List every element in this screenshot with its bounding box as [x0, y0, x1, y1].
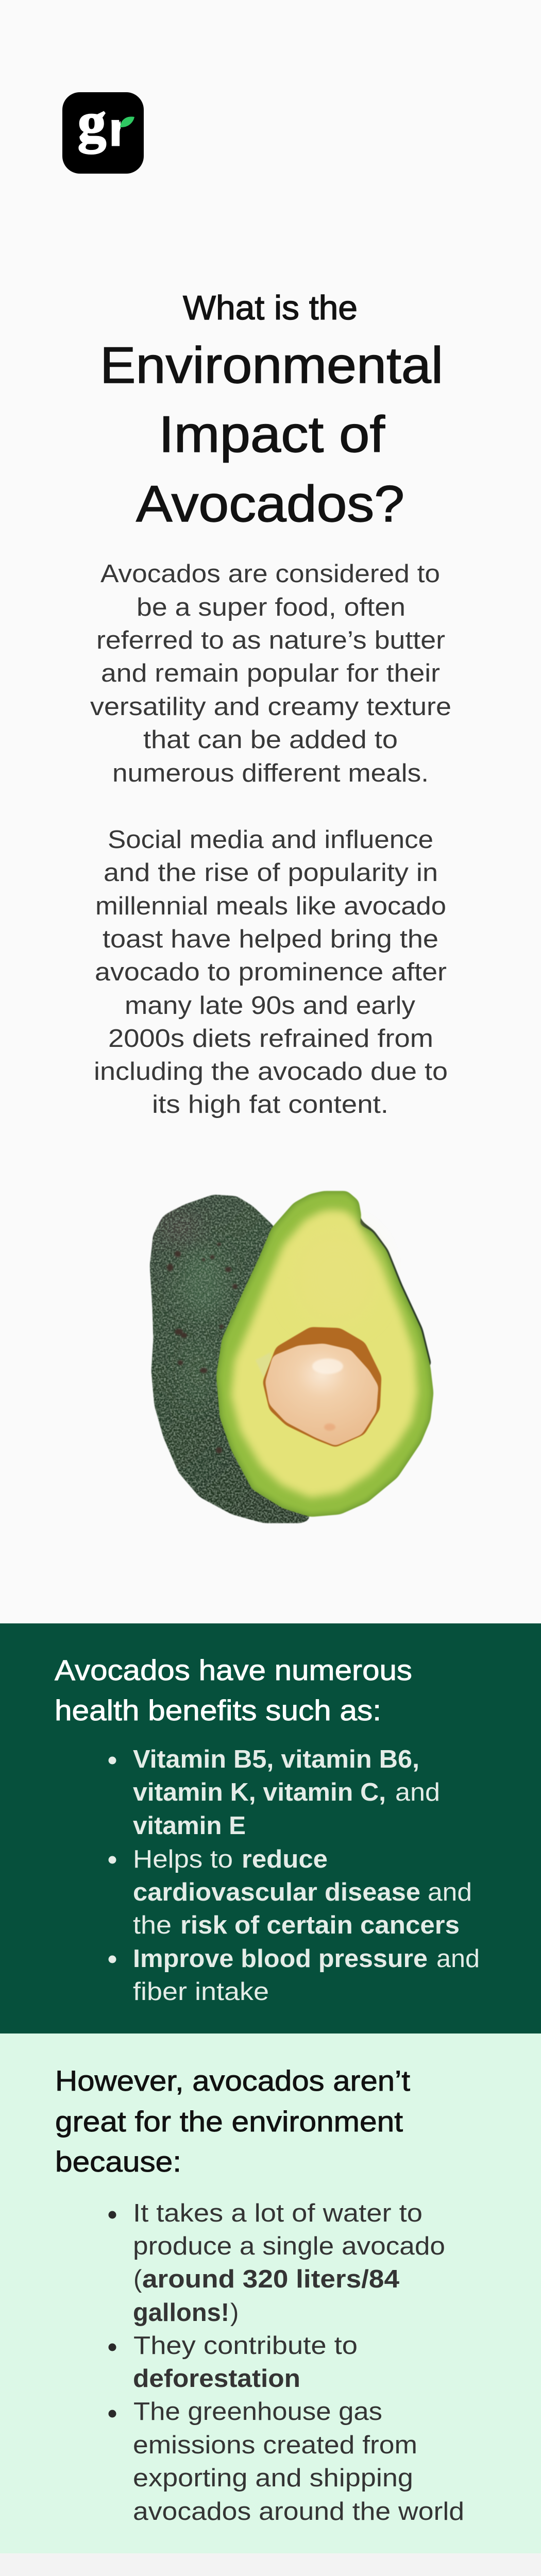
list: health benefits: fiber intake: [133, 1978, 269, 2006]
second paragraph: avocado to prominence after: [95, 958, 447, 986]
title: Environmental: [100, 336, 443, 394]
list: health benefits: the: [133, 1911, 172, 1939]
list: health benefits: cardiovascular disease: [133, 1878, 420, 1906]
list: environmental issues: gallons!: [133, 2299, 229, 2327]
avocado skin: [150, 1195, 309, 1523]
list: health benefits: [108, 1745, 480, 2006]
list: health benefits: vitamin E: [133, 1812, 246, 1840]
list: health benefits: Improve blood pressure: [133, 1945, 428, 1973]
list: environmental issues: deforestation: [133, 2365, 300, 2393]
second paragraph: many late 90s and early: [125, 992, 416, 1020]
list: environmental issues: They contribute to: [133, 2332, 358, 2360]
intro paragraph: numerous different meals.: [112, 759, 429, 787]
list: environmental issues: emissions created from: [133, 2431, 417, 2459]
avocado seed: [256, 1327, 381, 1447]
list: health benefits: reduce: [242, 1845, 328, 1873]
intro paragraph: Avocados are considered to: [100, 560, 440, 588]
intro paragraph: be a super food, often: [137, 594, 405, 621]
panel: environmental issues: [0, 2033, 541, 2553]
second paragraph: millennial meals like avocado: [95, 892, 446, 920]
list: health benefits: Vitamin B5, vitamin B6,: [133, 1745, 419, 1773]
list: health benefits: Helps to: [133, 1845, 233, 1873]
logo icon: gr app badge: r: [109, 104, 127, 156]
list: health benefits: and: [395, 1778, 440, 1806]
intro paragraph: and remain popular for their: [101, 659, 440, 687]
second paragraph: Social media and influence: [108, 826, 433, 854]
illustration: halved avocado: [150, 1192, 432, 1523]
list: health benefits: risk of certain cancers: [180, 1911, 460, 1939]
list: environmental issues: around 320 liters/84: [142, 2265, 399, 2293]
title: Avocados?: [136, 475, 404, 532]
second paragraph: [94, 826, 448, 1118]
list: environmental issues: produce a single avocado: [133, 2232, 445, 2260]
panel: substitutes: [0, 2553, 541, 2576]
second paragraph: 2000s diets refrained from: [108, 1025, 433, 1053]
list: environmental issues: avocados around the world: [133, 2498, 464, 2526]
second paragraph: toast have helped bring the: [103, 925, 438, 953]
second paragraph: including the avocado due to: [94, 1058, 448, 1086]
list: environmental issues: It takes a lot of water to: [133, 2199, 422, 2227]
list: health benefits: vitamin K, vitamin C,: [133, 1778, 386, 1806]
logo icon: gr app badge: g: [78, 91, 106, 154]
list: environmental issues: (: [133, 2265, 142, 2293]
intro paragraph: referred to as nature’s butter: [96, 626, 445, 654]
heading: environmental issues: However, avocados aren’t: [55, 2064, 410, 2097]
list: environmental issues: The greenhouse gas: [133, 2398, 382, 2426]
list: health benefits: and: [436, 1945, 480, 1973]
second paragraph: its high fat content.: [152, 1091, 388, 1118]
title: What is the: [183, 289, 358, 327]
list: health benefits: and: [428, 1878, 472, 1906]
logo icon: gr app badge: [62, 91, 144, 174]
title: [100, 289, 443, 532]
list: environmental issues: [108, 2199, 464, 2526]
panel: health benefits: [0, 1623, 541, 2033]
heading: health benefits: Avocados have numerous: [55, 1654, 412, 1686]
intro paragraph: versatility and creamy texture: [90, 693, 451, 721]
heading: environmental issues: because:: [55, 2145, 181, 2178]
avocado flesh: [217, 1192, 432, 1516]
panel: intro: [62, 91, 451, 1524]
heading: health benefits: health benefits such as:: [55, 1694, 381, 1726]
second paragraph: and the rise of popularity in: [104, 859, 438, 887]
intro paragraph: [90, 560, 451, 787]
heading: health benefits: [55, 1654, 412, 1726]
title: Impact of: [159, 405, 385, 463]
list: environmental issues: ): [230, 2299, 239, 2327]
heading: environmental issues: [55, 2064, 410, 2178]
intro paragraph: that can be added to: [143, 726, 398, 754]
heading: environmental issues: great for the environment: [55, 2105, 403, 2138]
list: environmental issues: exporting and shipping: [133, 2464, 413, 2492]
